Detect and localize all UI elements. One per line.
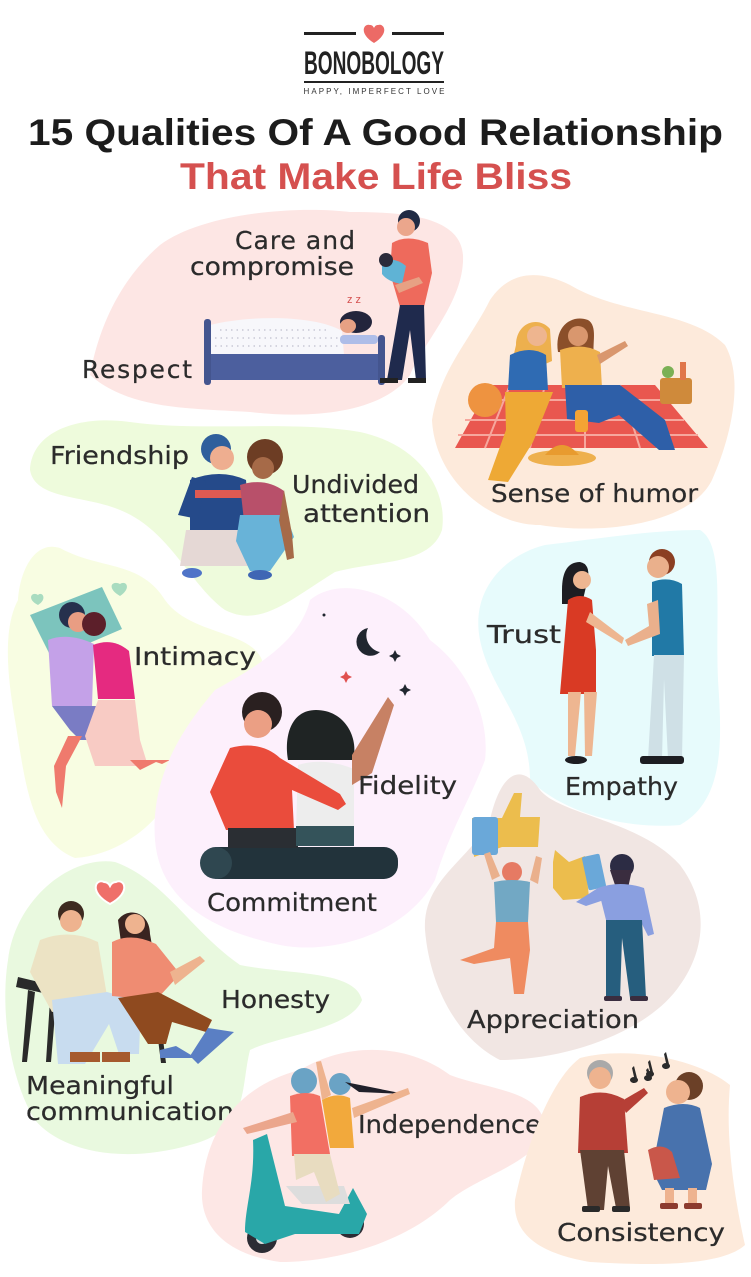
panel: consistency xyxy=(515,1052,745,1264)
label: trust: Trust xyxy=(486,620,561,649)
icon: woman holding hands xyxy=(560,562,624,764)
icon: intimate couple xyxy=(48,602,170,808)
icon: moon and stars xyxy=(322,614,411,696)
panel: friendship and undivided attention xyxy=(30,420,443,616)
title: 15 Qualities Of A Good Relationship xyxy=(28,112,723,153)
label: sense of humor: Sense of humor xyxy=(491,479,699,508)
label: intimacy: Intimacy xyxy=(134,642,256,671)
label: commitment: Commitment xyxy=(207,888,377,917)
icon: thumbs up xyxy=(472,793,606,900)
panel: sense of humor xyxy=(432,275,735,529)
icon: heart xyxy=(96,881,124,904)
label: honesty: Honesty xyxy=(221,985,330,1014)
label: care and compromise: compromise xyxy=(190,252,354,281)
label: appreciation: Appreciation xyxy=(467,1005,639,1034)
label: undivided attention xyxy=(292,470,430,528)
logo: Bonobology: BONOBOLOGY xyxy=(304,45,444,81)
icon: picnic blanket xyxy=(455,385,708,448)
icon: father holding baby xyxy=(379,210,432,383)
logo: Bonobology xyxy=(304,25,444,96)
icon: music notes xyxy=(630,1052,670,1083)
label: empathy: Empathy xyxy=(565,772,678,801)
title xyxy=(28,112,723,197)
logo: Bonobology: HAPPY, IMPERFECT LOVE xyxy=(304,87,444,96)
panel: care, compromise and respect xyxy=(82,210,463,415)
label: fidelity: Fidelity xyxy=(358,771,457,800)
icon: scooter riders xyxy=(243,1061,410,1253)
panel: honesty and meaningful communication xyxy=(5,861,362,1154)
title: That Make Life Bliss xyxy=(180,156,572,197)
label: respect: Respect xyxy=(82,355,192,384)
icon: man holding hands xyxy=(625,549,684,764)
label: meaningful communication: Meaningful xyxy=(26,1071,174,1100)
panel: independence xyxy=(202,1050,545,1262)
label: undivided attention: attention xyxy=(303,499,430,528)
icon: pillow and hearts xyxy=(30,583,127,659)
panel: intimacy xyxy=(8,547,262,858)
icon: bed with sleeper: z z xyxy=(347,294,361,306)
label: meaningful communication: communication xyxy=(26,1097,234,1126)
panel: fidelity and commitment xyxy=(155,588,486,947)
icon: dancing grandparents xyxy=(578,1060,712,1212)
icon: bearded man xyxy=(576,854,654,1001)
panel: appreciation xyxy=(425,774,701,1060)
label: undivided attention: Undivided xyxy=(292,470,419,499)
label: independence: Independence xyxy=(358,1110,541,1139)
icon: couple on a log xyxy=(200,692,398,879)
icon: bench couple xyxy=(16,901,234,1064)
label: care and compromise xyxy=(190,226,355,281)
label: care and compromise: Care and xyxy=(235,226,355,255)
panel: trust and empathy xyxy=(478,530,720,826)
icon: bed with sleeper xyxy=(204,294,385,385)
icon: friends hugging xyxy=(178,434,294,580)
icon: woman cheering xyxy=(460,852,542,994)
label: consistency: Consistency xyxy=(557,1218,725,1247)
label: friendship: Friendship xyxy=(50,441,189,470)
label: meaningful communication xyxy=(26,1071,234,1126)
icon: picnic couple xyxy=(468,318,692,482)
